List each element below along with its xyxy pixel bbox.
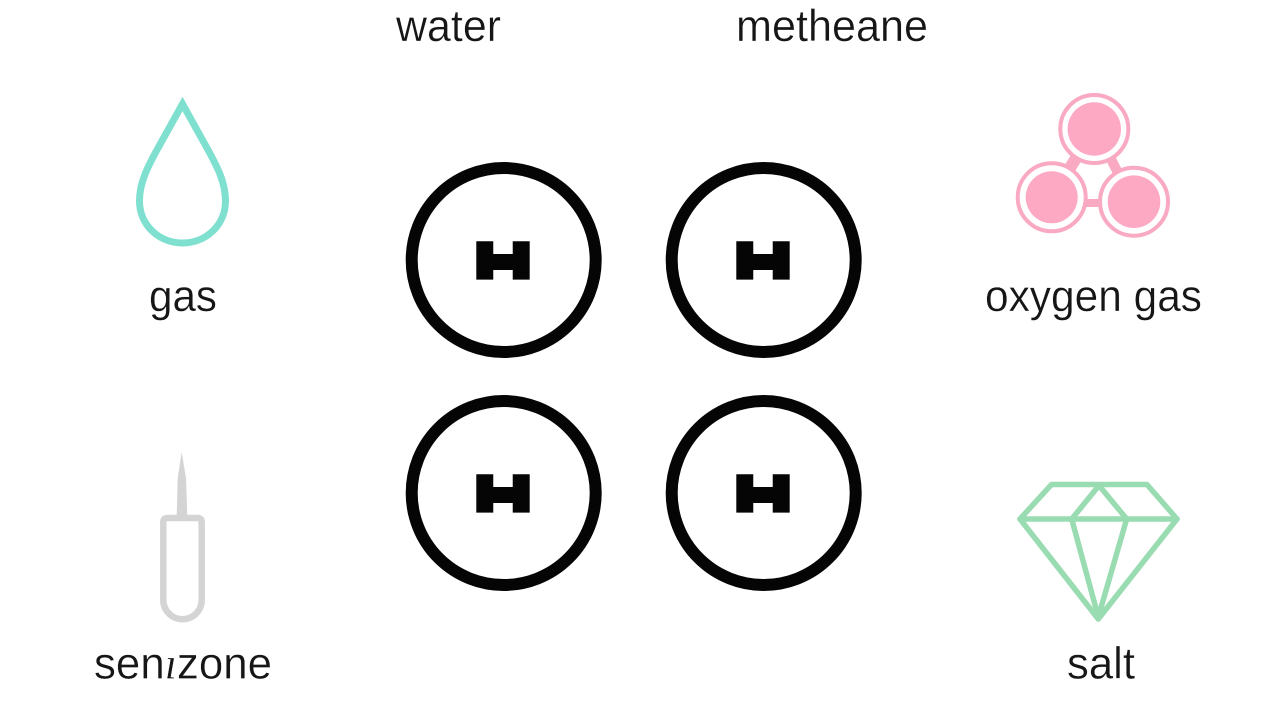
molecule: top right hydrogen xyxy=(672,168,856,352)
label: salt: salt xyxy=(1067,640,1136,688)
label: gas: gas xyxy=(149,272,217,321)
molecule: bottom right hydrogen xyxy=(672,401,856,585)
heading: metheane: metheane xyxy=(736,2,928,51)
molecule: top left hydrogen: H xyxy=(473,232,533,289)
icon: water drop xyxy=(140,104,226,243)
molecule: top left hydrogen xyxy=(412,168,596,352)
molecule: top right hydrogen: H xyxy=(733,232,793,289)
molecule: bottom right hydrogen: H xyxy=(733,465,793,522)
icon: diamond xyxy=(1020,484,1177,619)
label: oxygen gas: oxygen gas xyxy=(985,272,1202,321)
molecule: bottom left hydrogen: H xyxy=(473,465,533,522)
icon: needle xyxy=(163,452,202,619)
molecule: bottom left hydrogen xyxy=(412,401,596,585)
heading: water: water xyxy=(395,2,501,51)
label: senizone: senızone xyxy=(94,638,272,688)
icon: oxygen molecule xyxy=(1018,95,1168,236)
